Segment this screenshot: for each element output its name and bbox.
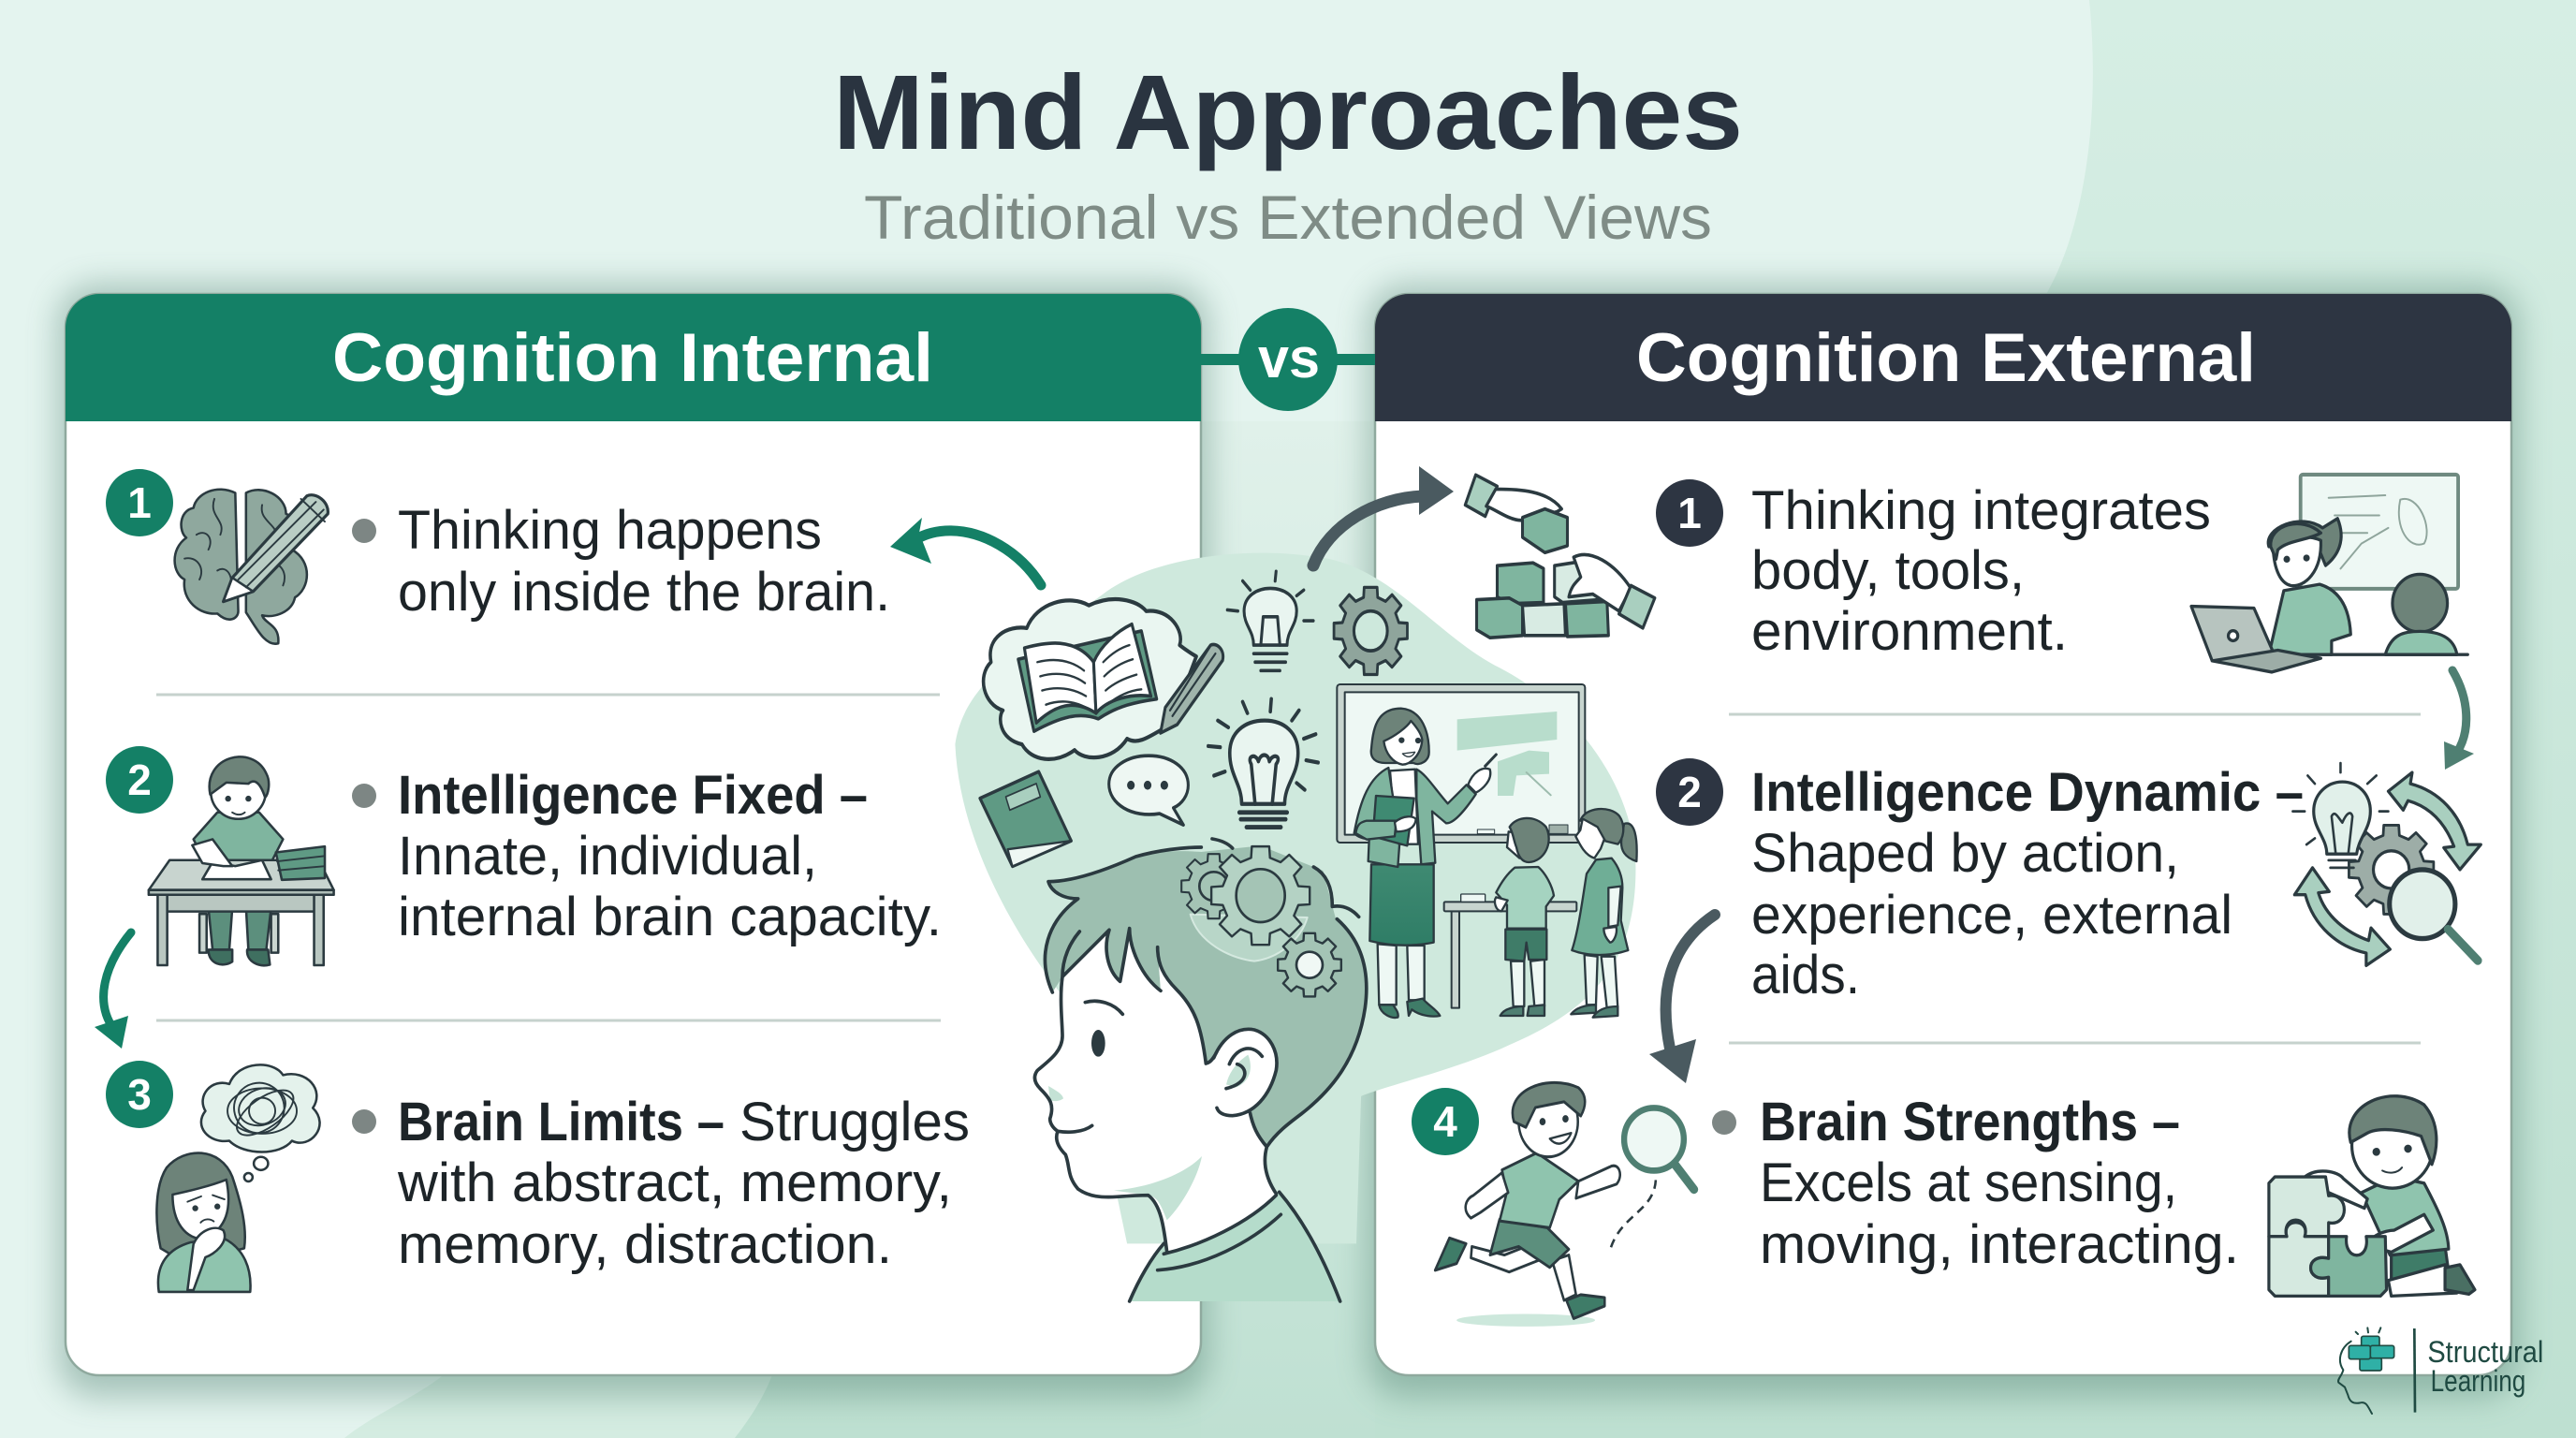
text block: brain limits: Brain Limits – [398,1092,724,1152]
badge 2 [106,746,173,814]
arrow: internal 2 to 3 [95,932,131,1049]
text block: intelligence dynamic: Intelligence Dynamic – [1751,762,2304,823]
header bar: cognition external [1375,294,2511,421]
text block: intelligence dynamic: Shaped by action, [1751,823,2179,884]
logo: structural learning [2338,1328,2543,1414]
thought cloud with open book [984,599,1196,759]
head outlines [1034,839,1367,1301]
subtitle: Traditional vs Extended Views [864,183,1712,252]
badge 2 [1656,758,1723,826]
text block: brain limits: memory, distraction. [398,1214,892,1275]
icon: confused woman [156,1064,320,1292]
boy head in profile [1034,839,1367,1301]
badge 1 [1656,479,1723,547]
hair [1045,845,1367,1147]
speech bubble dots [1127,781,1168,790]
text block: intelligence fixed [352,765,942,947]
small lightbulb [1227,571,1313,670]
gears in head [1181,846,1341,996]
shirt [1130,1192,1340,1301]
pencil [1161,644,1223,733]
vs connector [1201,308,1375,411]
teacher [1354,709,1496,1018]
badge 1 [106,469,173,536]
icon: hands and blocks [1465,475,1655,638]
text block: thinking integrates [1751,480,2211,662]
logo head outline [2338,1328,2380,1414]
text block: brain strengths [1712,1092,2239,1275]
text block: thinking integrates: body, tools, [1751,540,2025,601]
whiteboard [1337,684,1585,843]
text block: brain limits: Struggles [739,1092,970,1152]
text block: brain strengths: Excels at sensing, [1760,1152,2177,1213]
vs connector: vs [1258,327,1320,389]
text block: thinking integrates: environment. [1751,601,2068,662]
boy from behind [1495,818,1554,1016]
panel: cognition external [1375,294,2511,1375]
heading: cognition external: Cognition External [1636,320,2256,396]
icon: running boy with magnifier [1435,1082,1620,1327]
panel: cognition internal [66,294,1201,1375]
arrow: external 1 to 2 [2444,670,2474,770]
eye [1091,1030,1105,1057]
badge 3: 3 [127,1070,152,1119]
badge 4: 4 [1433,1097,1457,1146]
large lightbulb [1208,699,1318,828]
icon: brain and pencil [175,490,328,644]
arrow: external 2 to 4 [1649,915,1715,1083]
arrow: centre to internal item 1 [890,518,1041,585]
icon: boy with puzzle [2269,1096,2475,1296]
badge 2: 2 [1677,768,1702,816]
face [1034,929,1248,1197]
text block: intelligence dynamic: aids. [1751,945,1860,1005]
arrow: centre to external item 1 [1313,466,1454,565]
ear [1210,1029,1277,1116]
header bar: cognition internal [66,294,1201,421]
logo cross [2349,1336,2394,1371]
central illustration [955,553,1635,1243]
badge 3 [106,1061,173,1128]
badge 1: 1 [1677,489,1702,537]
text block: intelligence dynamic: experience, external [1751,885,2232,946]
badge 2: 2 [127,756,152,804]
speech bubble [1109,756,1188,825]
logo: structural learning: Learning [2431,1364,2525,1398]
cheek and nose shading [1048,1086,1202,1220]
neck [1135,1105,1276,1252]
icon: magnifier [1610,1108,1694,1249]
girl [1571,809,1637,1018]
text block: thinking happens [352,500,890,623]
text block: thinking happens: only inside the brain. [398,562,890,623]
badge 1: 1 [127,478,152,527]
text block: brain strengths: Brain Strengths – [1760,1092,2180,1152]
text block: thinking happens: Thinking happens [398,500,822,561]
text block: intelligence fixed: Intelligence Fixed – [398,765,868,826]
heading: cognition internal: Cognition Internal [332,320,933,396]
icon: student at desk [149,756,334,965]
title: Mind Approaches [833,53,1743,171]
gear [1334,587,1407,674]
text block: brain strengths: moving, interacting. [1760,1214,2239,1275]
icon: bulb gear magnifier cycle [2292,763,2481,965]
text block: intelligence dynamic [1751,762,2304,1005]
teacher and children at whiteboard [1337,684,1637,1018]
logo: structural learning: Structural [2427,1335,2543,1369]
table [1444,894,1576,1008]
text block: thinking integrates: Thinking integrates [1751,480,2211,541]
icon: girl with laptop and whiteboard [2191,475,2467,672]
green book [980,771,1071,866]
background blob [955,553,1635,1243]
text block: intelligence fixed: internal brain capacity. [398,887,942,947]
text block: brain limits: with abstract, memory, [397,1152,952,1213]
badge 4 [1412,1088,1479,1155]
text block: intelligence fixed: Innate, individual, [398,826,817,887]
text block: brain limits [352,1092,970,1275]
